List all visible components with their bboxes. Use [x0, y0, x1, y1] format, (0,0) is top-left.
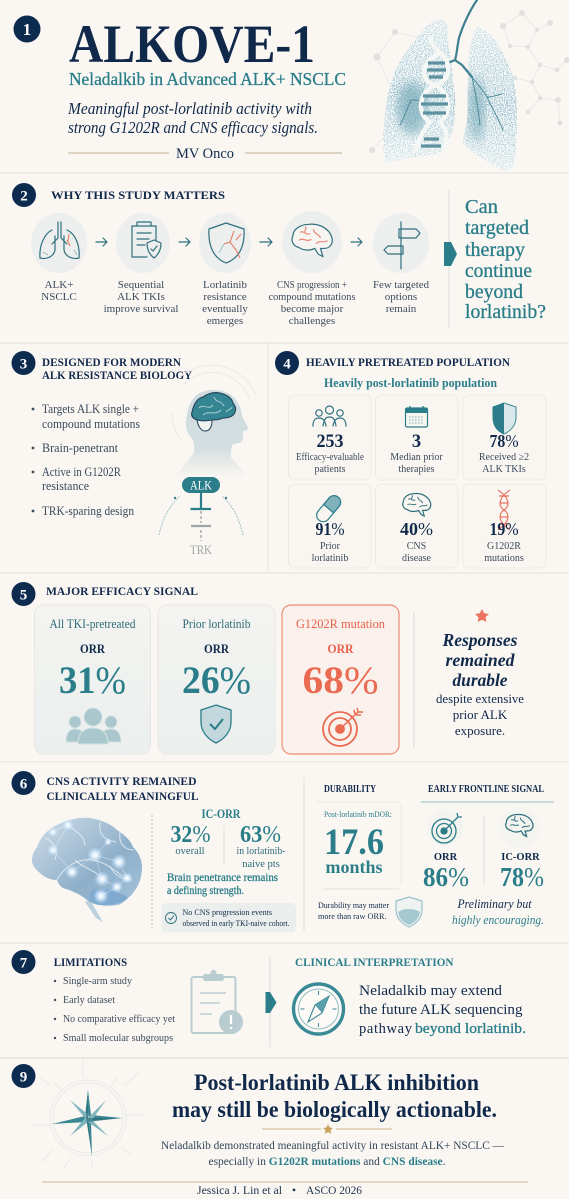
dashed divider	[151, 815, 153, 928]
IC-ORR statistics: in lorlatinib-	[236, 846, 286, 857]
step: lorlatinib resistance: Lorlatinib	[203, 279, 247, 291]
interpretation statement: Neladalkib may extend	[359, 983, 503, 999]
limitations heading: LIMITATIONS	[54, 955, 127, 969]
early frontline signal block: EARLY FRONTLINE SIGNAL	[428, 784, 544, 795]
card: prior lorlatinib: Prior lorlatinib	[182, 617, 250, 631]
step: sequential TKIs: improve survival	[104, 303, 178, 315]
ALK to TRK selectivity diagram	[159, 477, 243, 557]
durability block: DURABILITY	[324, 784, 376, 795]
card: 91%: Prior	[320, 541, 341, 552]
question callout: lorlatinib?	[465, 301, 546, 323]
durable responses callout: Responses	[442, 630, 518, 650]
card: 253 patients: Efficacy-evaluable	[296, 452, 365, 463]
section badge 6	[12, 771, 36, 795]
durable responses callout	[436, 609, 524, 738]
citation: Jessica J. Lin et al	[197, 1183, 283, 1197]
conclusion heading: may still be biologically actionable.	[172, 1097, 497, 1123]
bullet list	[32, 402, 140, 518]
question callout: therapy	[465, 239, 526, 261]
tagline: Meaningful post-lorlatinib activity with	[67, 99, 312, 118]
title: ALKOVE-1	[69, 14, 315, 74]
IC-ORR statistics: 32%	[170, 822, 210, 848]
durable responses callout: exposure.	[455, 723, 505, 738]
bullet list: Targets ALK single +	[42, 402, 139, 416]
bullet list: Active in G1202R	[42, 465, 122, 479]
card: 78%: Received ≥2	[479, 452, 529, 463]
question callout: continue	[465, 260, 532, 282]
citation: ASCO 2026	[306, 1183, 362, 1197]
callout: no CNS progression	[162, 903, 296, 932]
section badge 5: 5	[20, 588, 27, 604]
question callout: targeted	[465, 217, 529, 239]
bullet list: compound mutations	[42, 417, 140, 431]
limitations list: Small molecular subgroups	[63, 1033, 173, 1044]
card: 78%	[463, 395, 546, 480]
icon: clipboard with alert	[192, 970, 243, 1034]
card: 19%: G1202R	[487, 541, 521, 552]
subtitle: Neladalkib in Advanced ALK+ NSCLC	[69, 69, 346, 89]
IC-ORR statistics: naive pts	[242, 859, 280, 870]
step: CNS progression: challenges	[289, 315, 335, 327]
bullet list: TRK-sparing design	[42, 504, 135, 518]
interpretation statement: the future ALK sequencing	[359, 1002, 522, 1018]
card: 3 prior therapies: therapies	[398, 464, 435, 475]
card: 19%: 19%	[490, 519, 518, 539]
step: few options: Few targeted	[373, 279, 429, 291]
durability block: Post-lorlatinib mDOR:	[324, 810, 392, 819]
arrow	[351, 238, 362, 246]
card: 91%	[288, 484, 371, 568]
step: few options: options	[385, 291, 417, 303]
brain penetrance statement: a defining strength.	[167, 883, 244, 897]
step: ALK+ NSCLC	[31, 213, 87, 303]
ALK to TRK selectivity diagram: ALK	[190, 478, 212, 492]
callout: no CNS progression: No CNS progression events	[182, 908, 272, 917]
section badge 3	[12, 351, 36, 375]
durable responses callout: prior ALK	[453, 707, 508, 722]
arrow	[179, 238, 190, 246]
early frontline signal block	[421, 784, 554, 927]
IC-ORR statistics: IC-ORR	[202, 807, 241, 821]
card: prior lorlatinib: ORR	[204, 642, 230, 656]
conclusion text: especially in G1202R mutations and CNS disease.	[208, 1156, 446, 1168]
bullet list: Brain-penetrant	[42, 441, 119, 455]
panel: major efficacy signal	[12, 582, 524, 754]
brain penetrance statement	[167, 870, 278, 897]
card: all TKI-pretreated: 31%	[59, 659, 126, 702]
step: lorlatinib resistance: resistance	[203, 291, 247, 303]
durability block: more than raw ORR.	[318, 911, 386, 921]
card: all TKI-pretreated: ORR	[80, 642, 106, 656]
heading: HEAVILY PRETREATED POPULATION	[306, 355, 510, 369]
step: sequential TKIs	[104, 213, 178, 315]
card: 40%: 40%	[400, 519, 433, 539]
conclusion heading	[172, 1070, 497, 1123]
interpretation statement	[359, 983, 526, 1037]
tagline: strong G1202R and CNS efficacy signals.	[68, 118, 318, 137]
footer rule	[42, 1181, 528, 1183]
citation: •	[292, 1183, 296, 1197]
section badge 9	[12, 1064, 36, 1088]
card: 91%: lorlatinib	[312, 553, 348, 564]
step: few options	[373, 213, 429, 315]
bullet list: resistance	[42, 479, 89, 493]
conclusion text: Neladalkib demonstrated meaningful activity in resistant ALK+ NSCLC —	[161, 1140, 504, 1152]
question callout	[465, 196, 546, 323]
heading	[42, 355, 192, 382]
durability block: months	[326, 857, 382, 877]
early frontline signal block: ORR	[434, 852, 458, 863]
card: 19%	[463, 484, 546, 568]
card: 3 prior therapies: Median prior	[390, 452, 443, 463]
card: 253 patients: 253	[316, 432, 344, 452]
step: ALK+ NSCLC: ALK+	[45, 279, 73, 291]
heading: MAJOR EFFICACY SIGNAL	[46, 584, 198, 598]
section badge 3: 3	[20, 356, 27, 372]
arrow	[260, 238, 272, 246]
callout: no CNS progression: observed in early TKI-naive cohort.	[182, 919, 290, 928]
step: ALK+ NSCLC: NSCLC	[41, 291, 77, 303]
panel: bottom line	[12, 1060, 528, 1197]
early frontline signal block: highly encouraging.	[452, 912, 544, 927]
card: 40%: disease	[402, 553, 431, 564]
step: CNS progression: become major	[281, 303, 344, 315]
panel: header	[14, 0, 569, 172]
ALK to TRK selectivity diagram: TRK	[190, 543, 212, 557]
card: G1202R mutation: ORR	[328, 642, 354, 656]
step: CNS progression: CNS progression +	[277, 279, 347, 291]
heading: ALK RESISTANCE BIOLOGY	[42, 368, 192, 382]
card: 40%: CNS	[407, 541, 426, 552]
heading: WHY THIS STUDY MATTERS	[51, 188, 225, 202]
IC-ORR statistics: overall	[175, 846, 205, 857]
panel: modern ALK resistance biology	[12, 351, 256, 557]
step: sequential TKIs: ALK TKIs	[117, 291, 165, 303]
heading: CLINICALLY MEANINGFUL	[46, 789, 198, 803]
heading: CNS ACTIVITY REMAINED	[46, 774, 197, 788]
section badge 4: 4	[283, 356, 291, 372]
card: prior lorlatinib: 26%	[182, 659, 251, 702]
section badge 5	[12, 582, 36, 606]
panel: why this study matters	[12, 183, 546, 328]
divider	[413, 612, 415, 748]
early frontline signal block: IC-ORR	[501, 852, 540, 863]
durable responses callout: despite extensive	[436, 691, 524, 706]
card: 253 patients	[288, 395, 371, 480]
icon: compass star	[31, 1060, 145, 1168]
subheading: Heavily post-lorlatinib population	[324, 375, 498, 390]
conclusion heading: Post-lorlatinib ALK inhibition	[194, 1070, 479, 1096]
step: CNS progression: compound mutations	[268, 291, 356, 303]
card: 253 patients: patients	[314, 464, 346, 475]
IC-ORR statistics: 63%	[240, 822, 281, 848]
section badge 1	[14, 16, 40, 42]
early frontline signal block: 86%	[423, 862, 469, 892]
brain penetrance statement: Brain penetrance remains	[167, 870, 278, 884]
early frontline signal block: Preliminary but	[457, 896, 532, 911]
step: few options: remain	[386, 303, 417, 315]
author line: MV Onco	[176, 146, 234, 162]
conclusion text	[161, 1140, 504, 1168]
interpretation statement: pathway	[359, 1021, 413, 1037]
card: 3 prior therapies: 3	[412, 432, 421, 452]
card: G1202R mutation	[282, 605, 399, 754]
section badge 2: 2	[20, 188, 28, 204]
step: lorlatinib resistance: emerges	[207, 315, 243, 327]
card: 40%	[376, 484, 458, 568]
early frontline signal block: 78%	[500, 862, 544, 892]
step: lorlatinib resistance	[199, 213, 251, 327]
clinical interpretation heading: CLINICAL INTERPRETATION	[295, 955, 454, 969]
durability block: 17.6	[324, 822, 384, 863]
icon: compass	[294, 984, 344, 1034]
head with brain	[172, 365, 256, 478]
durable responses callout: durable	[452, 670, 508, 690]
illustration: lungs, DNA and molecular network	[369, 0, 569, 172]
divider and arrow	[444, 190, 457, 328]
card: all TKI-pretreated	[34, 605, 150, 754]
card: 3 prior therapies	[376, 395, 458, 480]
divider	[303, 777, 305, 932]
limitations list: Single-arm study	[63, 976, 133, 987]
heading: DESIGNED FOR MODERN	[42, 355, 181, 369]
section badge 7: 7	[20, 956, 28, 972]
section badge 9: 9	[20, 1070, 27, 1086]
step: sequential TKIs: Sequential	[118, 279, 164, 291]
ornament	[262, 1124, 392, 1134]
step: lorlatinib resistance: eventually	[202, 303, 248, 315]
panel: limitations and clinical interpretation	[12, 950, 526, 1047]
section badge 1: 1	[23, 20, 31, 39]
card: 78%: 78%	[490, 431, 518, 451]
durability block	[316, 784, 422, 927]
section badge 7	[12, 950, 36, 974]
IC-ORR statistics	[170, 807, 286, 870]
durability block: Durability may matter	[318, 900, 389, 910]
question callout: beyond	[465, 281, 523, 303]
arrow	[96, 238, 107, 246]
step: CNS progression	[268, 211, 356, 327]
limitations list: No comparative efficacy yet	[63, 1014, 175, 1025]
tagline	[67, 99, 318, 137]
limitations list: Early dataset	[63, 995, 115, 1006]
section badge 4	[275, 351, 299, 375]
illustration: glowing brain	[32, 818, 142, 922]
interpretation statement: beyond lorlatinib.	[415, 1021, 526, 1037]
citation	[197, 1183, 362, 1197]
card: prior lorlatinib	[158, 605, 275, 754]
heading	[46, 774, 198, 803]
card: 78%: ALK TKIs	[482, 464, 526, 475]
section badge 2	[12, 183, 36, 207]
limitations list	[54, 976, 175, 1044]
card: G1202R mutation: 68%	[302, 659, 378, 702]
card: G1202R mutation: G1202R mutation	[296, 617, 386, 631]
panel: CNS activity	[12, 771, 554, 932]
card: 19%: mutations	[484, 553, 524, 564]
divider and arrow	[266, 957, 276, 1047]
panel: heavily pretreated population	[275, 351, 546, 568]
question callout: Can	[465, 196, 498, 218]
durable responses callout: remained	[446, 650, 515, 670]
section badge 6: 6	[20, 776, 28, 792]
card: all TKI-pretreated: All TKI-pretreated	[50, 617, 136, 631]
card: 91%: 91%	[316, 519, 344, 539]
